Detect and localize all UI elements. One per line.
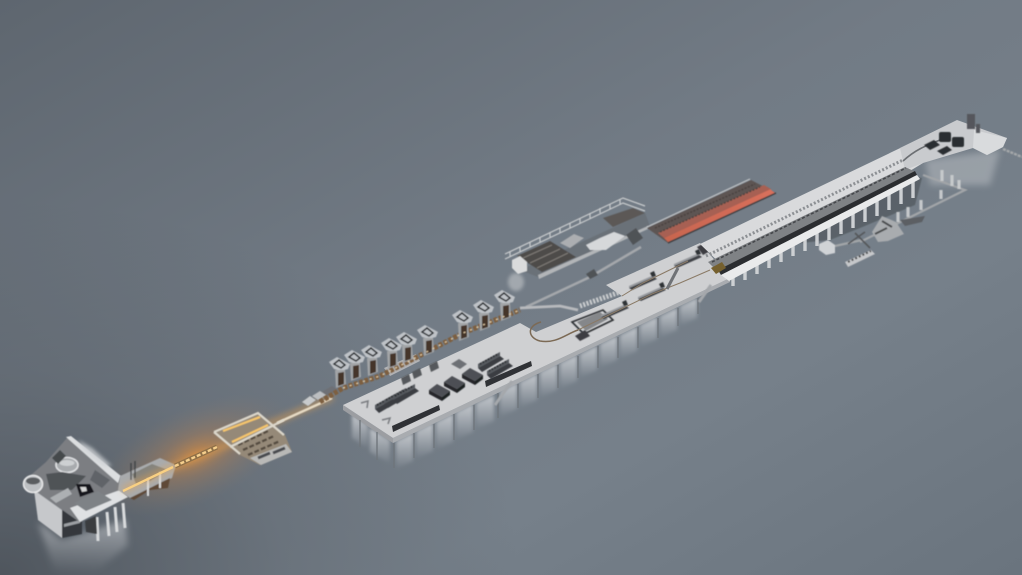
main platform lower hall bbox=[343, 226, 751, 468]
bottom-left vignette bbox=[0, 200, 520, 575]
bed base bbox=[647, 180, 776, 243]
white pipework bbox=[586, 232, 625, 250]
strip deck bbox=[700, 140, 926, 273]
cross arm bbox=[848, 232, 870, 248]
end platform raised bbox=[973, 130, 1007, 155]
bed ribs bbox=[655, 184, 760, 232]
hot strand line bbox=[123, 397, 333, 491]
reheating grate bbox=[213, 413, 292, 465]
grate frame bbox=[214, 413, 284, 454]
reflection under upper beds bbox=[508, 273, 524, 291]
strip lower white edge bbox=[721, 175, 920, 281]
plant dark machinery bbox=[46, 472, 86, 490]
strip end deck bbox=[900, 120, 1007, 170]
curved entry track bbox=[903, 140, 940, 161]
connecting track bbox=[578, 261, 710, 330]
grate slots bbox=[238, 431, 280, 455]
plant body wall bbox=[34, 490, 62, 538]
platform deck bbox=[343, 243, 730, 438]
bed of rollers bbox=[845, 250, 875, 267]
white building bbox=[819, 240, 835, 255]
dark cabinets bbox=[429, 368, 483, 401]
gantry railing bbox=[505, 198, 645, 259]
plant pillars bbox=[97, 503, 125, 541]
racks group east bbox=[478, 352, 513, 379]
stands bbox=[329, 290, 515, 388]
curved track bbox=[530, 322, 578, 342]
small machines bbox=[361, 359, 467, 424]
plant converters bbox=[24, 458, 78, 492]
frame machine bbox=[572, 310, 613, 334]
yard posts bbox=[898, 170, 959, 222]
exit rollers bbox=[1003, 149, 1022, 157]
central machinery bbox=[872, 216, 904, 242]
side railing bbox=[580, 292, 620, 306]
yellow machine bbox=[711, 262, 726, 274]
caster section bbox=[118, 458, 176, 500]
fuzzy wall top bbox=[78, 440, 112, 466]
reflection under far end bbox=[925, 150, 1000, 185]
strip piers bbox=[733, 173, 913, 286]
plant back wall bbox=[66, 436, 121, 483]
small unit bbox=[586, 269, 598, 279]
stair ramp bbox=[495, 285, 711, 405]
glowing bars bbox=[223, 417, 268, 442]
tall tower bbox=[967, 114, 980, 133]
dark junction bbox=[626, 228, 643, 245]
diagonal bridge bbox=[667, 268, 678, 289]
grate floor bbox=[213, 413, 292, 465]
gantry feed conveyor bbox=[526, 247, 641, 307]
rolling stands row bbox=[320, 290, 520, 402]
cooling conveyor bbox=[708, 167, 916, 272]
conveyors between sections bbox=[520, 247, 641, 310]
melt shop plant bbox=[24, 436, 128, 541]
curved roller table bbox=[520, 306, 578, 310]
gantry base bbox=[520, 213, 650, 277]
reflections under main platform bbox=[352, 298, 697, 469]
long strip platform bbox=[700, 120, 1007, 286]
cooling bed north bbox=[603, 208, 645, 227]
platform side bbox=[343, 405, 393, 443]
red cooling bed bbox=[647, 179, 776, 243]
plant top deck bbox=[25, 438, 128, 521]
red hot zone bbox=[664, 189, 775, 242]
upper gantry platform bbox=[505, 198, 650, 279]
bed rails bbox=[647, 179, 750, 227]
dark tanks bbox=[924, 132, 964, 155]
mid hall plinth bbox=[384, 354, 420, 376]
grate bottom trays bbox=[250, 444, 292, 465]
process capsules bbox=[601, 226, 751, 319]
orange furnace glow bbox=[80, 368, 310, 542]
far end finishing area bbox=[924, 114, 1022, 157]
racks group south bbox=[375, 384, 419, 413]
long dark bar south bbox=[392, 405, 440, 432]
dark machines at junction bbox=[575, 241, 722, 341]
yard rails bbox=[835, 175, 965, 246]
track highlights bbox=[343, 310, 520, 388]
platform piers bbox=[360, 298, 698, 468]
long dark bar east bbox=[485, 361, 532, 387]
reflection under plant bbox=[38, 520, 128, 573]
south-east yard bbox=[819, 170, 965, 267]
stand track bbox=[320, 310, 520, 402]
plant lower floors bbox=[62, 510, 82, 538]
plant front deck bbox=[70, 490, 128, 522]
transfer rollers bbox=[302, 386, 338, 406]
strip dark underside bbox=[790, 176, 922, 244]
caster structure bbox=[118, 458, 176, 498]
cooling bed west bbox=[517, 241, 576, 272]
white box machine bbox=[512, 256, 527, 274]
